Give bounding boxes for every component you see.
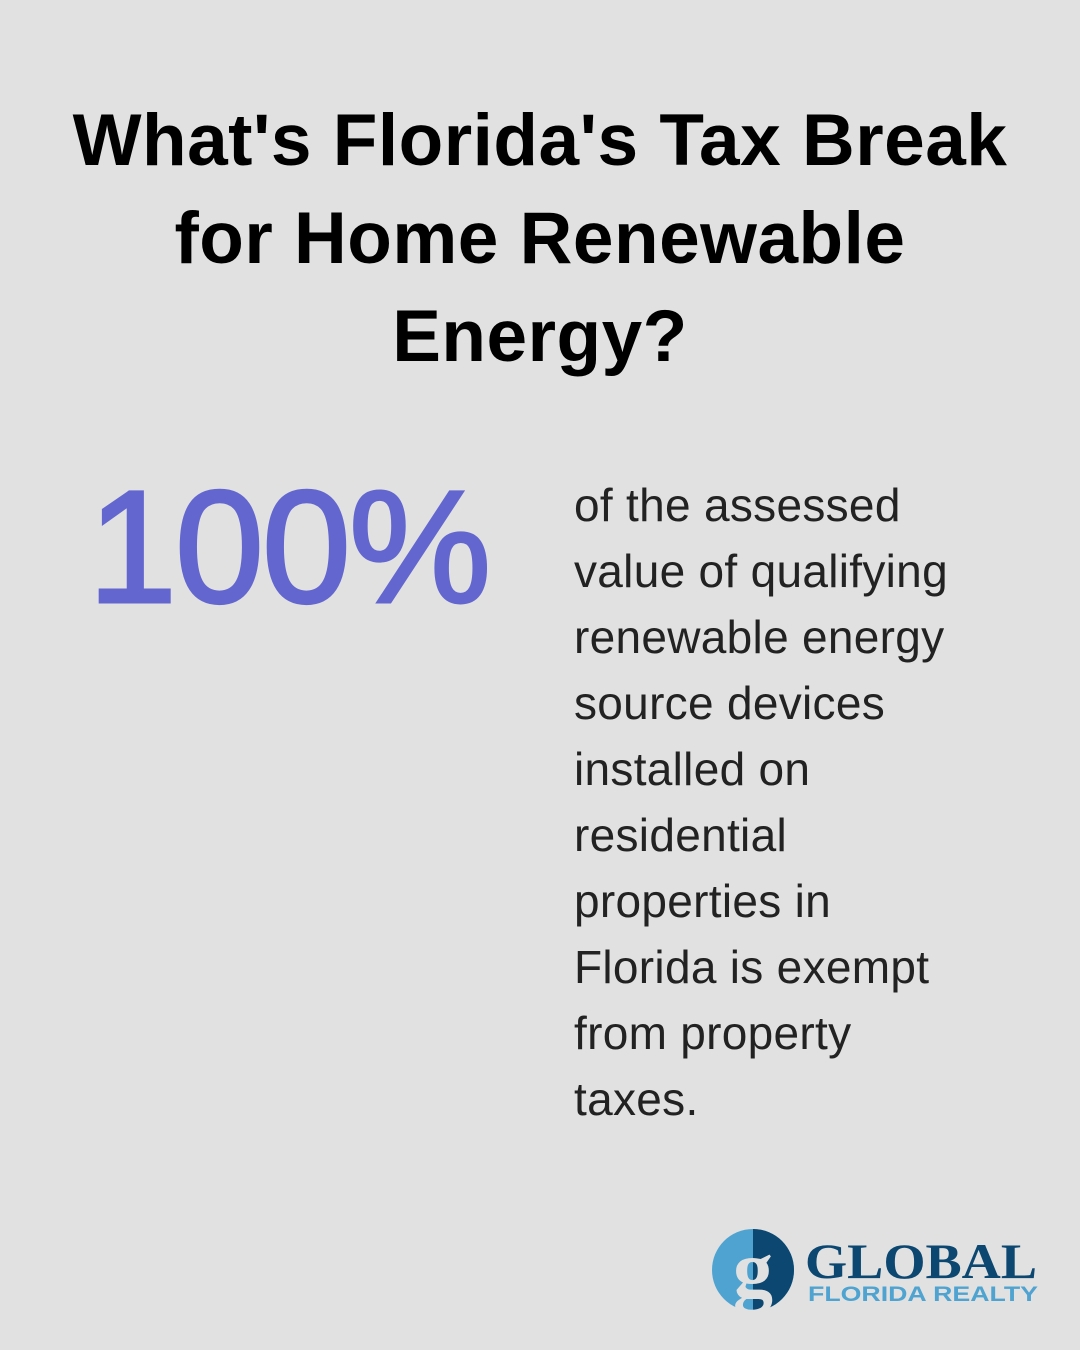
title: [72, 100, 1007, 377]
logo text: GLOBAL: [805, 1233, 1037, 1289]
title: What's Florida's Tax Break: [73, 100, 1007, 181]
logo: [712, 1228, 1038, 1312]
description text: value of qualifying: [574, 545, 948, 597]
description text: from property: [574, 1007, 851, 1059]
stat number: 100%: [88, 457, 489, 636]
description text: [574, 479, 948, 1125]
description text: installed on: [574, 743, 810, 795]
description text: Florida is exempt: [574, 941, 929, 993]
description text: properties in: [574, 875, 831, 927]
description text: of the assessed: [574, 479, 901, 531]
title: for Home Renewable: [174, 198, 906, 279]
description text: residential: [574, 809, 787, 861]
icon: logo circle: [712, 1226, 794, 1314]
description text: renewable energy: [574, 611, 944, 663]
logo text: FLORIDA REALTY: [808, 1283, 1038, 1306]
description text: taxes.: [574, 1073, 699, 1125]
description text: source devices: [574, 677, 885, 729]
title: Energy?: [392, 296, 688, 377]
